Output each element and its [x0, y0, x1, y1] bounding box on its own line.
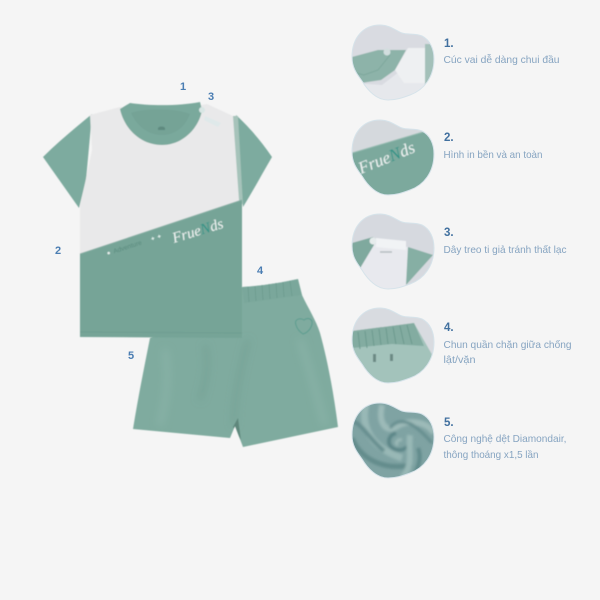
feature 3 text: Dây treo ti giả tránh thất lạc — [444, 244, 566, 256]
feature 4 text: 4. — [444, 322, 454, 334]
feature 4 text: Chun quần chặn giữa chống — [444, 339, 572, 351]
feature 3 text: 3. — [444, 227, 454, 239]
feature 2 text: Hình in bền và an toàn — [444, 149, 543, 161]
feature 5 text: Công nghệ dệt Diamondair, — [444, 433, 566, 445]
pacifier tag — [204, 116, 221, 127]
feature 4 text: lật/vặn — [444, 354, 476, 366]
right sleeve — [236, 115, 272, 207]
green shoulder strip — [233, 116, 243, 205]
shoulder button — [199, 107, 205, 113]
marker 5: 5 — [128, 350, 134, 362]
feature 3 text — [444, 227, 566, 256]
feature 5 text — [444, 417, 566, 461]
icon: heart 4 waistband — [352, 308, 434, 383]
small embroidery: Adventure — [113, 239, 143, 255]
embroidery: Friends: FrueNds — [170, 216, 226, 247]
white panel — [80, 104, 242, 254]
feature 5 text: thông thoáng x1,5 lần — [444, 449, 539, 461]
shorts — [133, 279, 338, 447]
icon: heart 2 print — [352, 120, 434, 195]
marker 3: 3 — [208, 91, 214, 103]
feature 1 text: Cúc vai dễ dàng chui đầu — [444, 53, 560, 66]
left sleeve — [43, 114, 92, 208]
neck label logo — [158, 126, 165, 130]
t-shirt — [43, 102, 272, 338]
feature 2 text: 2. — [444, 132, 454, 144]
collar — [120, 102, 202, 145]
feature 1 text: 1. — [444, 38, 454, 50]
marker 2: 2 — [55, 245, 61, 257]
icon: heart 1 shoulder button — [352, 25, 434, 100]
feature 5 text: 5. — [444, 417, 454, 429]
marker 1: 1 — [180, 81, 186, 93]
small embroidery: ✦ ✦ — [150, 233, 163, 243]
feature 1 text — [444, 38, 560, 66]
lower green panel — [80, 200, 242, 338]
feature 2 text — [444, 132, 543, 161]
marker 4: 4 — [257, 265, 264, 277]
icon: heart 5 fabric swirl — [352, 403, 434, 478]
icon: heart 2 print: FrueNds — [354, 138, 418, 178]
icon: heart embroidery — [296, 319, 312, 334]
small embroidery — [107, 233, 163, 257]
icon: heart 3 pacifier strap — [352, 214, 434, 289]
feature 4 text — [444, 322, 572, 366]
